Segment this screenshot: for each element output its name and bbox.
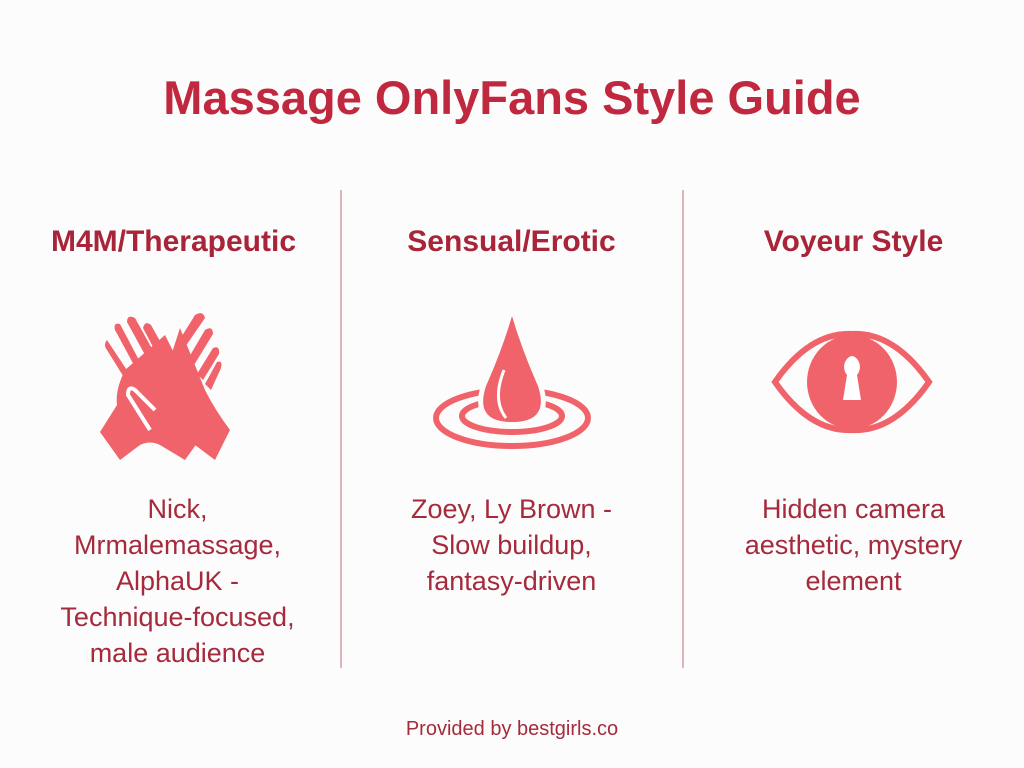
text: column 1: male audience [90,638,265,668]
icon: hands [100,313,230,460]
text: column 1: AlphaUK - [116,566,239,596]
text: column 2: Slow buildup, [431,530,592,560]
icon: drop with ripples [433,316,591,449]
text: column 3: aesthetic, mystery [745,530,962,560]
text: column 2: Zoey, Ly Brown - [411,494,612,524]
footer: Provided by bestgirls.co [406,718,618,740]
text: column 3: element [805,566,902,596]
heading: Sensual/Erotic: Sensual/Erotic [407,225,616,258]
text: column 1 [60,494,295,668]
text: column 1: Nick, [148,494,208,524]
title: Massage OnlyFans Style Guide [163,71,861,124]
heading: M4M/Therapeutic: M4M/Therapeutic [51,225,296,258]
text: column 1: Technique-focused, [60,602,295,632]
text: column 2 [411,494,612,596]
heading: Voyeur Style: Voyeur Style [764,225,943,258]
text: column 3 [745,494,962,596]
text: column 2: fantasy-driven [427,566,596,596]
icon: eye with keyhole [771,330,933,434]
text: column 3: Hidden camera [762,494,945,524]
text: column 1: Mrmalemassage, [74,530,281,560]
